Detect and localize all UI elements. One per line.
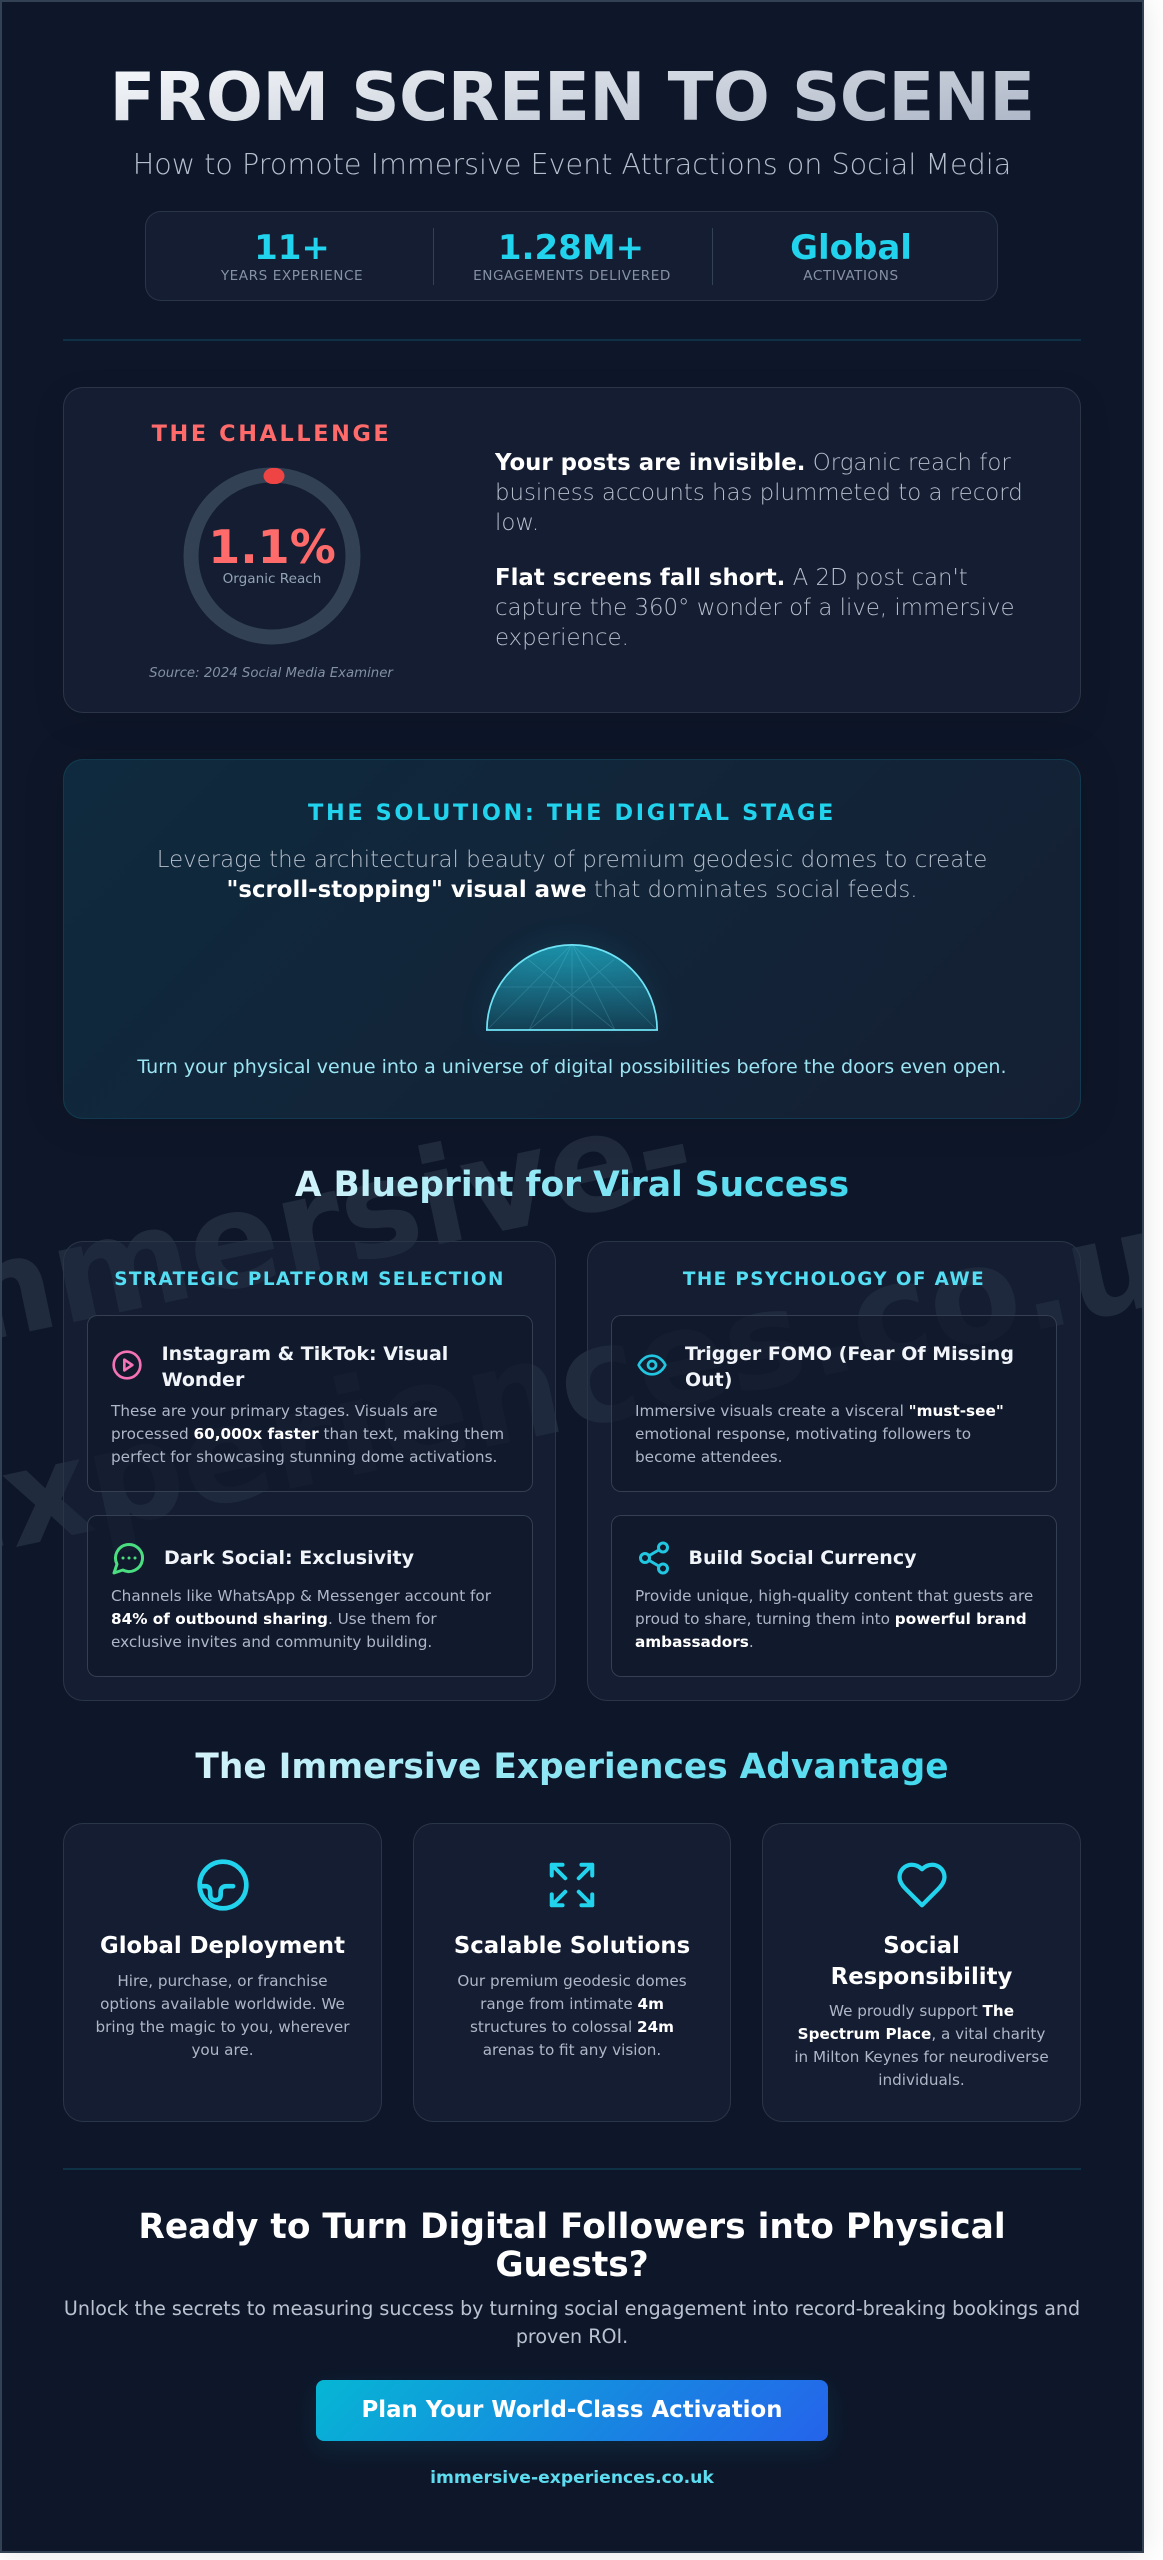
card body: proud to share, turning them into powerful brand [635, 1610, 1027, 1628]
card body: arenas to fit any vision. [483, 2041, 661, 2059]
card body: Immersive visuals create a visceral "must-see" [635, 1402, 1004, 1420]
panel: psychology of awe [587, 1241, 1081, 1701]
card body: These are your primary stages. Visuals are [111, 1402, 438, 1420]
icon: heart [897, 1862, 947, 1908]
title: FROM SCREEN TO SCENE [110, 58, 1034, 136]
stat: 1.1%: 1.1% [208, 520, 336, 574]
card body: individuals. [878, 2071, 965, 2089]
card body: Hire, purchase, or franchise [117, 1972, 328, 1990]
heading: blueprint: A Blueprint for Viral Success [295, 1165, 849, 1205]
call to action heading: Guests? [495, 2245, 649, 2285]
card body: in Milton Keynes for neurodiverse [794, 2048, 1049, 2066]
stat: engagements: 1.28M+ [498, 228, 644, 268]
card title [162, 1342, 448, 1391]
icon: eye [637, 1354, 667, 1376]
card body: ambassadors. [635, 1633, 754, 1651]
card title: Social [883, 1933, 960, 1959]
card title: Scalable Solutions [454, 1933, 690, 1959]
card: scalable solutions [413, 1823, 731, 2122]
icon: chat bubble [112, 1543, 144, 1574]
card body: you are. [191, 2041, 254, 2059]
text: posts invisible: business accounts has plummeted to a record [495, 480, 1023, 506]
card body: range from intimate 4m [480, 1995, 664, 2013]
card body [457, 1972, 687, 2059]
card body: Spectrum Place, a vital charity [798, 2025, 1045, 2043]
panel heading: STRATEGIC PLATFORM SELECTION [114, 1269, 505, 1290]
text: flat screens: experience. [495, 625, 629, 651]
solution text [157, 846, 987, 903]
stat label: global: ACTIVATIONS [803, 268, 899, 284]
stat label: engagements: ENGAGEMENTS DELIVERED [473, 268, 671, 284]
website link: immersive-experiences.co.uk [430, 2468, 714, 2488]
call to action text: proven ROI. [516, 2326, 628, 2348]
card body: Our premium geodesic domes [457, 1972, 687, 1990]
card body: Channels like WhatsApp & Messenger account for [111, 1587, 491, 1605]
card: social currency [611, 1515, 1057, 1677]
card: social responsibility [762, 1823, 1081, 2122]
call to action text [64, 2298, 1080, 2348]
card body [635, 1402, 1004, 1466]
donut chart: organic reach [184, 468, 360, 644]
label: organic reach: Organic Reach [223, 571, 321, 587]
card title: Instagram & TikTok: Visual [162, 1342, 448, 1364]
stat label: years: YEARS EXPERIENCE [221, 268, 363, 284]
solution heading: THE SOLUTION: THE DIGITAL STAGE [308, 800, 836, 826]
text: posts invisible: Your posts are invisible. Organic reach for [495, 450, 1011, 476]
solution text: "scroll-stopping" visual awe that dominates social feeds. [226, 877, 918, 903]
dome illustration [486, 944, 658, 1031]
card body: options available worldwide. We [100, 1995, 345, 2013]
stats bar [145, 211, 998, 301]
card body [111, 1587, 491, 1651]
icon: expand arrows [550, 1862, 594, 1908]
text: posts invisible: low. [495, 510, 539, 536]
call to action heading: Ready to Turn Digital Followers into Physical [138, 2207, 1006, 2247]
card title [831, 1933, 1012, 1990]
card title: Wonder [162, 1369, 244, 1391]
button [316, 2380, 828, 2441]
panel: the challenge [63, 387, 1081, 713]
solution tagline: Turn your physical venue into a universe of digital possibilities before the doors even open. [137, 1056, 1007, 1078]
card title: Dark Social: Exclusivity [164, 1547, 414, 1569]
button: Plan Your World-Class Activation [362, 2397, 782, 2423]
card body [635, 1587, 1033, 1651]
text: posts invisible [494, 450, 1023, 536]
solution text: Leverage the architectural beauty of premium geodesic domes to create [157, 846, 987, 872]
stat: global: Global [790, 228, 912, 268]
text: flat screens: Flat screens fall short. A 2D post can't [495, 564, 968, 590]
card title: Responsibility [831, 1964, 1012, 1990]
card title: Build Social Currency [688, 1547, 916, 1569]
card: dark social [87, 1515, 533, 1677]
subtitle: How to Promote Immersive Event Attractions on Social Media [133, 147, 1011, 181]
icon: share [639, 1542, 669, 1574]
text: flat screens [495, 564, 1015, 651]
icon: globe [197, 1859, 249, 1911]
card body [794, 2002, 1049, 2089]
card title [685, 1342, 1014, 1391]
stat: years: 11+ [254, 228, 330, 268]
card title: Out) [685, 1369, 732, 1391]
heading: advantage: The Immersive Experiences Advantage [195, 1746, 949, 1786]
card body: 84% of outbound sharing. Use them for [111, 1610, 437, 1628]
card: instagram and tiktok [87, 1315, 533, 1492]
challenge heading: THE CHALLENGE [152, 420, 391, 446]
card body: exclusive invites and community building. [111, 1633, 432, 1651]
panel: strategic platform selection [63, 1241, 556, 1701]
card body [96, 1972, 350, 2059]
card title: Global Deployment [100, 1933, 345, 1959]
panel heading: THE PSYCHOLOGY OF AWE [683, 1269, 985, 1290]
card body: We proudly support The [829, 2002, 1014, 2020]
call to action text: Unlock the secrets to measuring success by turning social engagement into record-breaking bookings and [64, 2298, 1080, 2320]
icon: play [112, 1350, 142, 1380]
card body: become attendees. [635, 1448, 782, 1466]
card body [110, 1402, 504, 1466]
card: trigger fomo [611, 1315, 1057, 1492]
card body: bring the magic to you, wherever [96, 2018, 349, 2036]
card: global deployment [63, 1823, 382, 2122]
card body: perfect for showcasing stunning dome activations. [111, 1448, 497, 1466]
text: flat screens: capture the 360° wonder of a live, immersive [495, 595, 1015, 621]
source note: Source: 2024 Social Media Examiner [149, 666, 393, 680]
call to action heading [138, 2207, 1006, 2285]
card body: structures to colossal 24m [470, 2018, 674, 2036]
card body: Provide unique, high-quality content that guests are [635, 1587, 1033, 1605]
panel: the solution [63, 759, 1081, 1119]
card body: emotional response, motivating followers to [635, 1425, 971, 1443]
card title: Trigger FOMO (Fear Of Missing [685, 1342, 1014, 1364]
card body: processed 60,000x faster than text, making them [111, 1425, 504, 1443]
